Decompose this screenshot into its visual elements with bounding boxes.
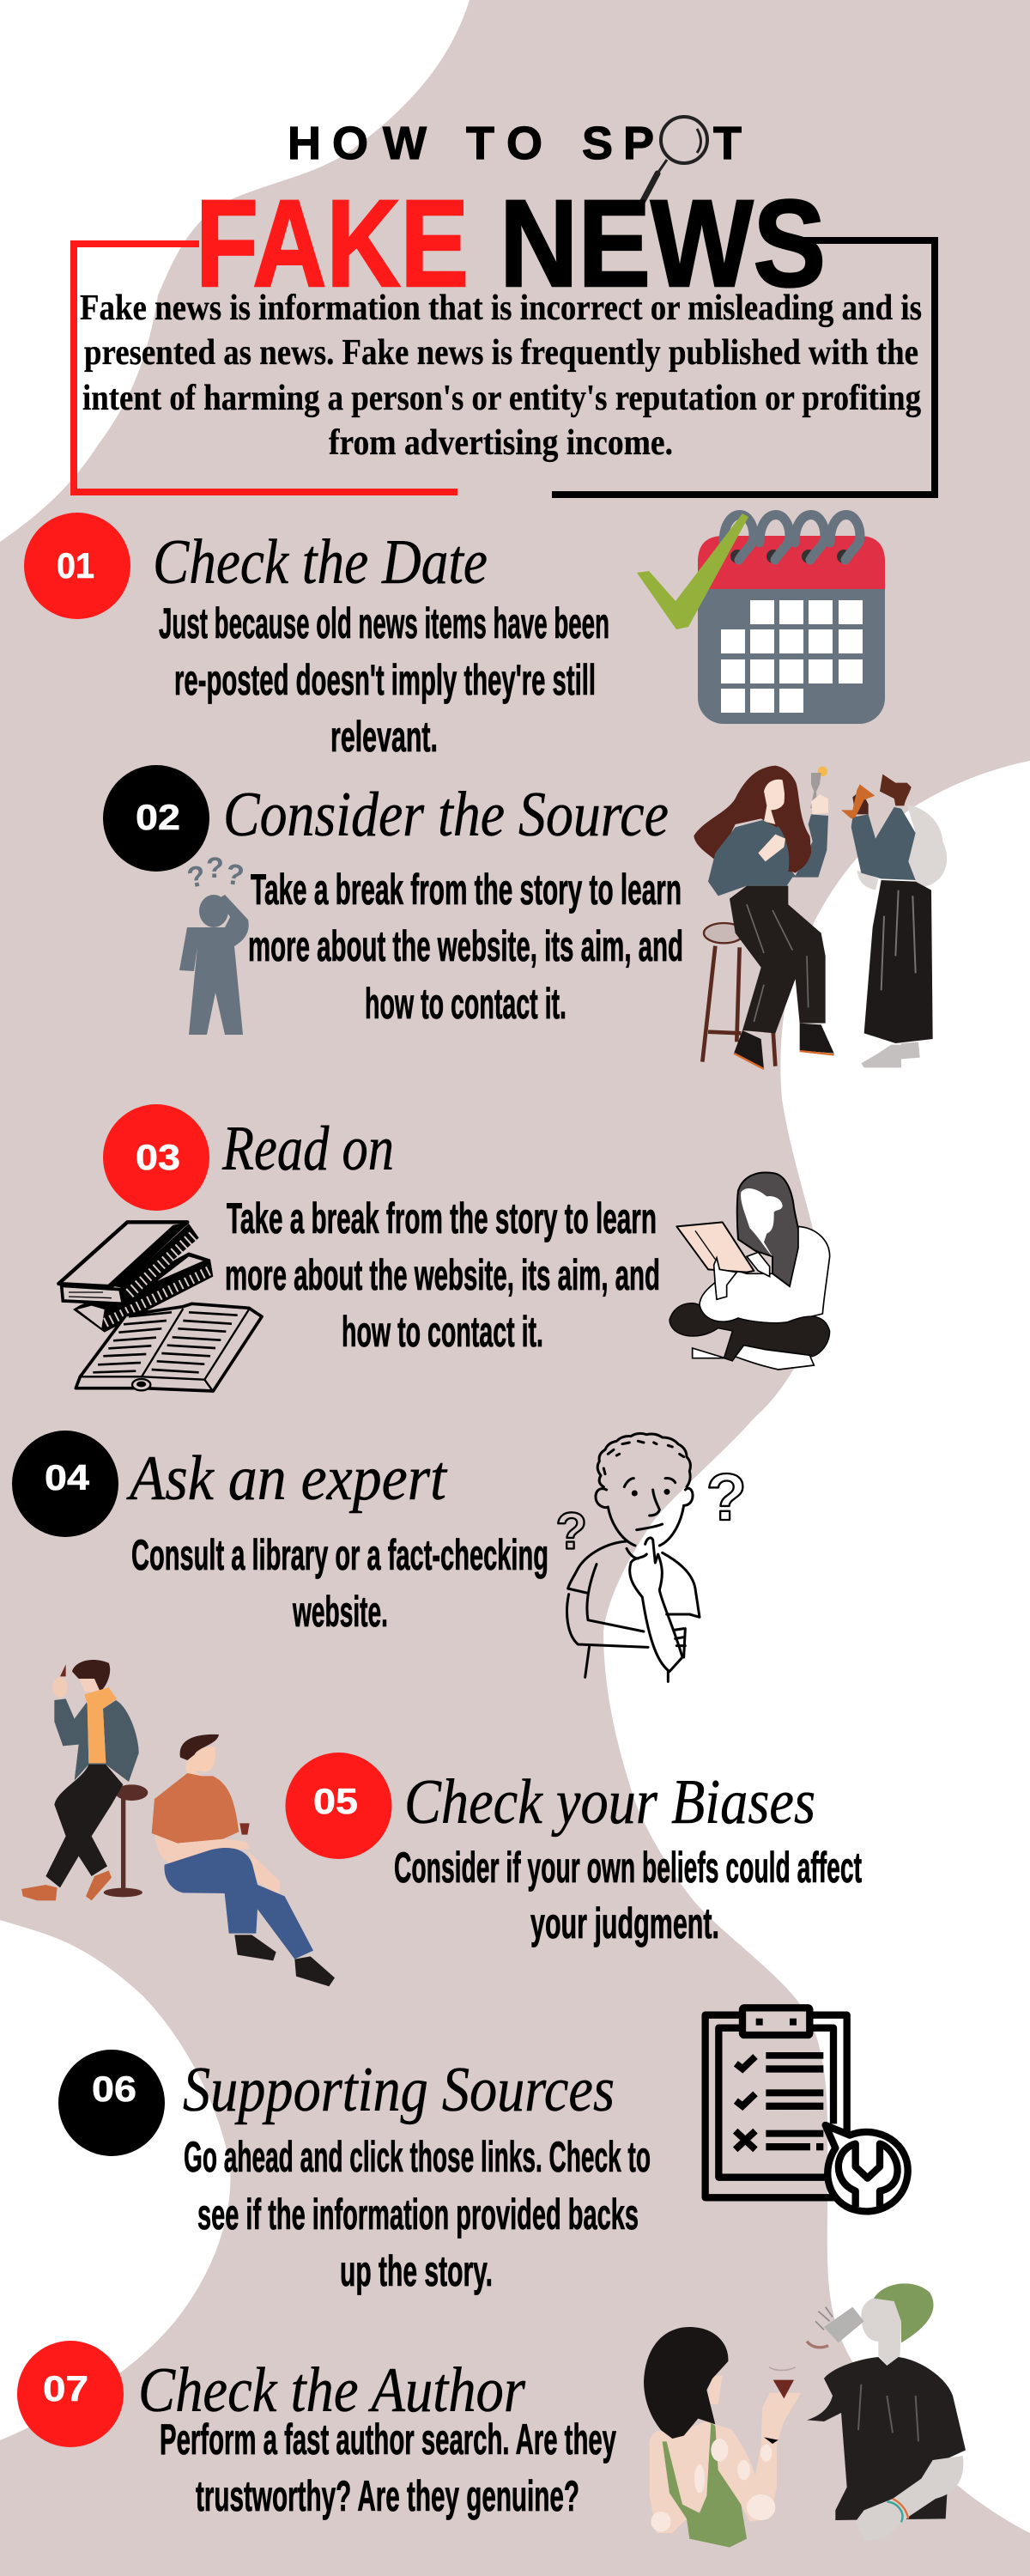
illustration: woman reading	[670, 1173, 830, 1370]
heading: news: NEWS	[500, 174, 826, 313]
heading: how to spot: HOW TO SP OT	[288, 118, 742, 169]
text 04: Consult a library or a fact-checking	[131, 1531, 548, 1579]
text 02: how to contact it.	[365, 980, 566, 1028]
text 02: Take a break from the story to learn	[251, 866, 682, 914]
illustration: thinking boy: ?	[706, 1461, 747, 1534]
text 03: Take a break from the story to learn	[227, 1194, 657, 1242]
badge 04	[12, 1431, 118, 1537]
text 03: how to contact it.	[342, 1308, 543, 1356]
heading 04: Ask an expert	[125, 1443, 448, 1514]
badge 05: 05	[313, 1781, 358, 1821]
heading 07: Check the Author	[138, 2355, 526, 2426]
badge 06: 06	[92, 2069, 136, 2109]
text 05	[394, 1844, 862, 1947]
icon: clipboard with wrench	[706, 2008, 908, 2211]
badge 03: 03	[136, 1137, 180, 1177]
icon: magnifying glass	[633, 117, 707, 204]
text 01: Just because old news items have been	[159, 599, 609, 647]
panel: 01 check the date	[24, 513, 885, 761]
icon: books	[58, 1222, 262, 1391]
text 05: your judgment.	[530, 1899, 719, 1947]
intro paragraph	[80, 289, 922, 463]
badge 04: 04	[45, 1457, 90, 1498]
title	[74, 117, 935, 495]
panel: 06 supporting sources	[58, 2008, 908, 2295]
text 02	[248, 866, 683, 1028]
text 07	[160, 2415, 616, 2520]
text 01: re-posted doesn't imply they're still	[174, 656, 596, 704]
panel: 03 read on	[58, 1104, 830, 1391]
text 01	[159, 599, 609, 761]
text 04	[131, 1531, 548, 1636]
text 06: Go ahead and click those links. Check to	[184, 2133, 651, 2181]
illustration: couple drinking	[644, 2283, 966, 2548]
heading: fake: FAKE	[196, 174, 469, 313]
badge 06	[58, 2050, 165, 2156]
illustration: two men seated	[21, 1660, 335, 1986]
badge 05	[285, 1753, 391, 1859]
text 03: more about the website, its aim, and	[225, 1251, 660, 1299]
intro paragraph: Fake news is information that is incorrect or misleading and is	[80, 289, 922, 328]
panel: 04 ask an expert	[12, 1431, 747, 1681]
heading 01: Check the Date	[153, 527, 488, 598]
illustration: thinking boy: ?	[555, 1502, 587, 1559]
icon: confused person: ?	[185, 860, 208, 895]
text 06: up the story.	[340, 2247, 493, 2295]
icon: confused person	[179, 852, 249, 1035]
badge 07: 07	[43, 2368, 88, 2409]
panel: 07 check the author	[17, 2283, 966, 2548]
illustration: two women toasting	[694, 766, 947, 1069]
badge 01	[24, 513, 130, 619]
heading 02: Consider the Source	[223, 780, 669, 850]
badge 01: 01	[57, 545, 94, 586]
badge 02: 02	[136, 797, 180, 837]
heading 05: Check your Biases	[404, 1767, 815, 1838]
text 03	[225, 1194, 660, 1356]
text 07: trustworthy? Are they genuine?	[196, 2472, 579, 2520]
text 01: relevant.	[330, 713, 438, 761]
icon: confused person: ?	[223, 858, 246, 893]
icon: calendar	[637, 513, 885, 724]
badge 03	[103, 1104, 209, 1211]
heading 06: Supporting Sources	[183, 2055, 615, 2125]
heading: fake news frame	[74, 240, 935, 495]
text 02: more about the website, its aim, and	[248, 922, 683, 970]
intro paragraph: intent of harming a person's or entity's reputation or profiting	[82, 379, 921, 418]
icon: confused person: ?	[206, 852, 224, 884]
text 07: Perform a fast author search. Are they	[160, 2415, 616, 2464]
panel: 05 check your biases	[21, 1660, 862, 1986]
illustration: thinking boy	[555, 1433, 747, 1681]
badge 02	[103, 765, 209, 872]
text 06	[184, 2133, 651, 2295]
badge 07	[17, 2341, 124, 2447]
intro paragraph: presented as news. Fake news is frequently published with the	[84, 333, 918, 373]
text 06: see if the information provided backs	[197, 2190, 639, 2239]
text 04: website.	[292, 1588, 388, 1636]
intro paragraph: from advertising income.	[329, 423, 673, 463]
panel: 02 consider the source	[103, 765, 947, 1069]
heading 03: Read on	[221, 1114, 394, 1184]
